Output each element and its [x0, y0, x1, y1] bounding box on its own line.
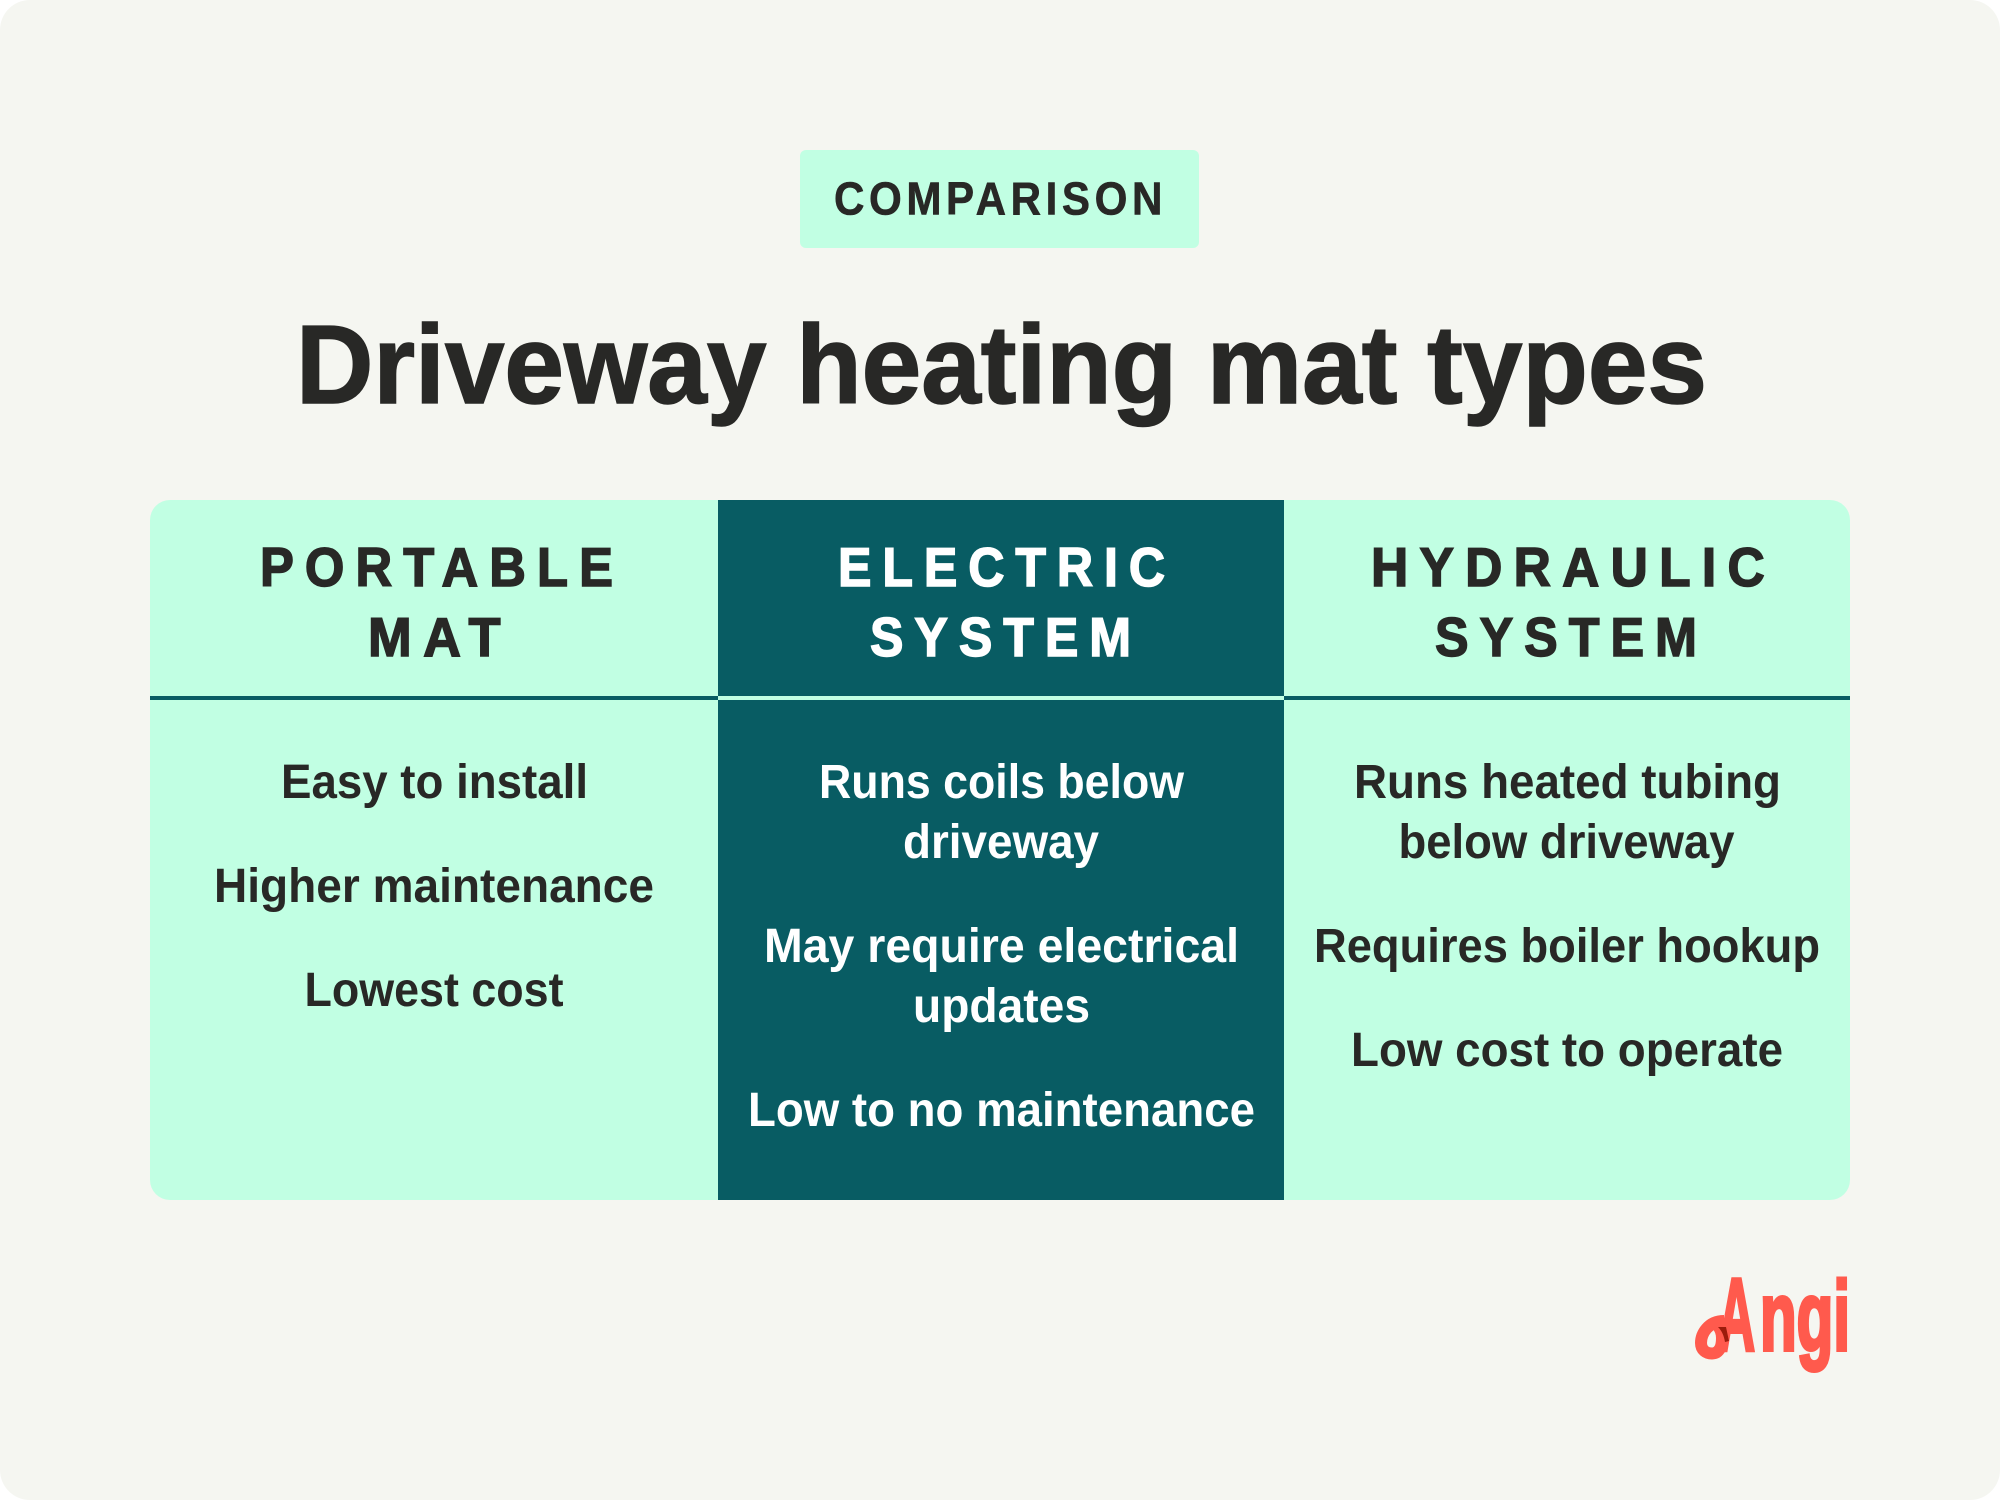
- list: electric system features: Low to no maintenance: [748, 1084, 1255, 1137]
- heading: hydraulic system: [1371, 536, 1776, 668]
- heading: electric system: SYSTEM: [870, 606, 1142, 668]
- list: electric system features: updates: [913, 980, 1090, 1033]
- heading: portable mat: [260, 536, 624, 668]
- list: electric system features: driveway: [903, 816, 1099, 869]
- logo: Angi: [1701, 1257, 1850, 1372]
- badge: comparison: [800, 150, 1199, 248]
- heading: electric system: ELECTRIC: [838, 536, 1176, 598]
- column background: [718, 500, 1284, 1200]
- title: Driveway heating mat types: [296, 303, 1707, 427]
- divider: electric system: [718, 696, 1284, 700]
- heading: portable mat: PORTABLE: [260, 536, 624, 598]
- list: portable mat features: Lowest cost: [304, 964, 564, 1017]
- heading: hydraulic system: HYDRAULIC: [1371, 536, 1776, 598]
- divider: portable mat: [150, 696, 718, 700]
- heading: portable mat: MAT: [368, 606, 512, 668]
- list: electric system features: [748, 756, 1255, 1137]
- badge: comparison: COMPARISON: [834, 172, 1167, 224]
- list: hydraulic system features: Requires boiler hookup: [1314, 920, 1820, 973]
- heading: electric system: [838, 536, 1176, 668]
- comparison table: [150, 500, 1850, 1200]
- panel: portable mat: [150, 536, 718, 1017]
- table background: [150, 500, 1850, 1200]
- list: electric system features: Runs coils below: [819, 756, 1185, 809]
- list: portable mat features: Easy to install: [281, 756, 588, 809]
- list: hydraulic system features: [1314, 756, 1820, 1077]
- heading: hydraulic system: SYSTEM: [1435, 606, 1708, 668]
- list: hydraulic system features: Runs heated tubing: [1354, 756, 1781, 809]
- list: hydraulic system features: Low cost to operate: [1351, 1024, 1783, 1077]
- logo wordmark: A: [1718, 1257, 1755, 1372]
- list: hydraulic system features: below driveway: [1398, 816, 1735, 869]
- logo overlap: [1718, 1327, 1729, 1342]
- list: electric system features: May require electrical: [764, 920, 1239, 973]
- list: portable mat features: [214, 756, 654, 1017]
- divider: hydraulic system: [1284, 696, 1850, 700]
- logo loop: [1701, 1321, 1724, 1354]
- panel: electric system: [718, 500, 1284, 1200]
- logo wordmark: ngi: [1760, 1261, 1850, 1371]
- list: portable mat features: Higher maintenance: [214, 860, 654, 913]
- panel: hydraulic system: [1284, 536, 1850, 1077]
